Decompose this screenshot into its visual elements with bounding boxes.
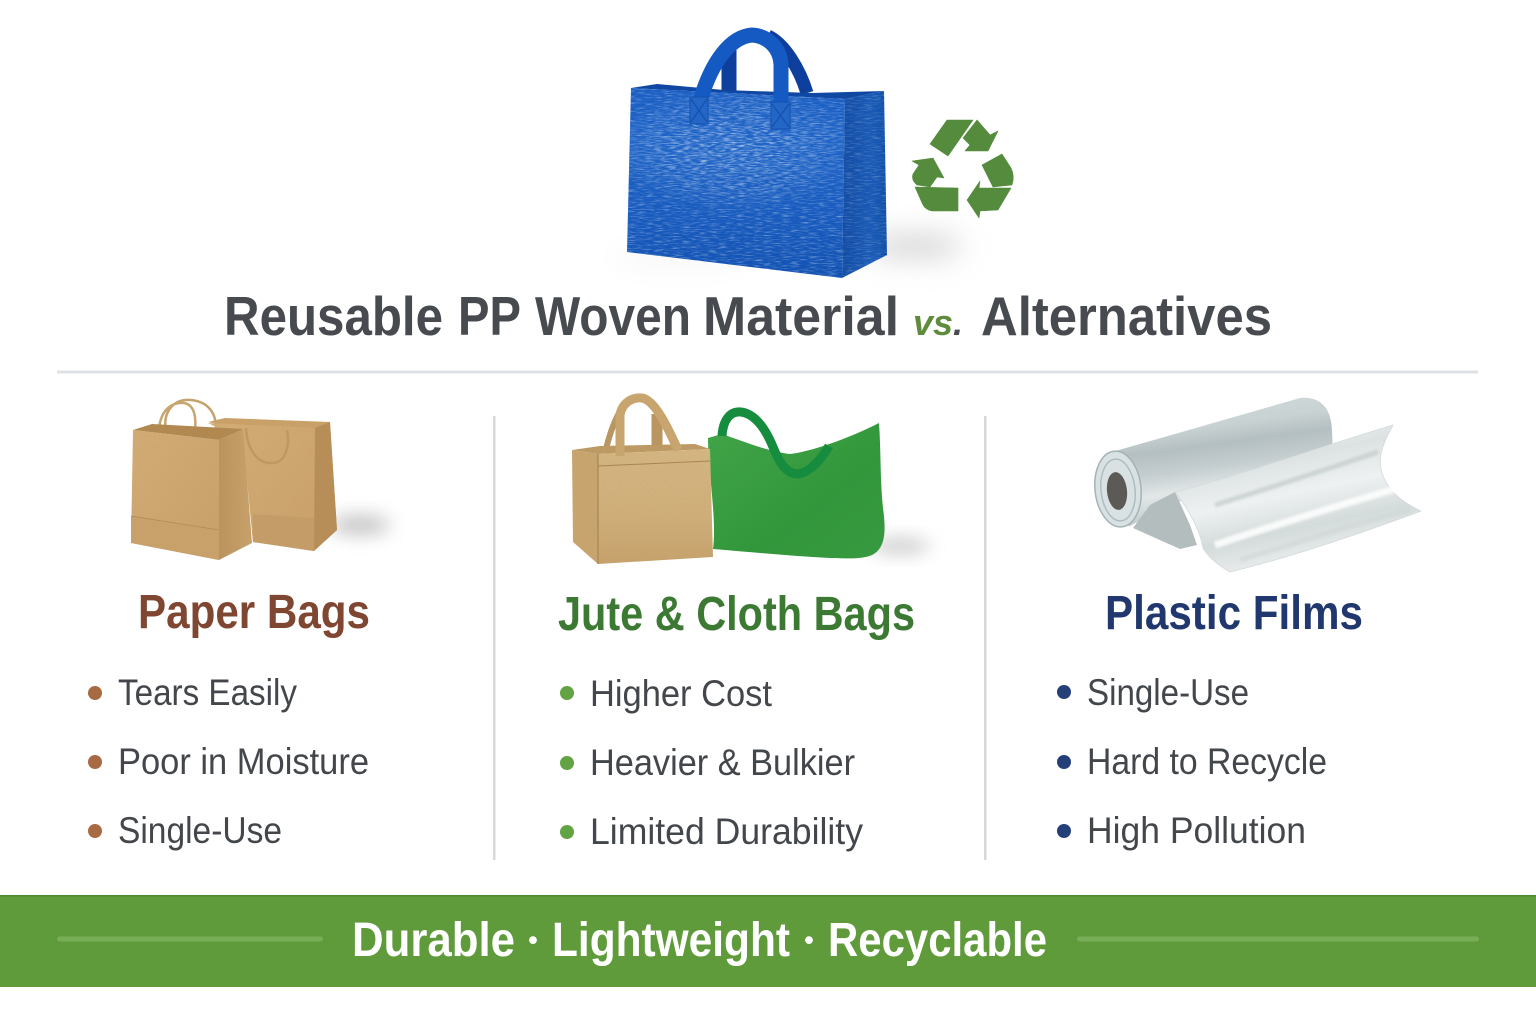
- heading: jute and cloth bags: Jute & Cloth Bags: [558, 588, 915, 641]
- list: plastic films: High Pollution: [1087, 810, 1306, 851]
- jute back straps: [606, 398, 632, 449]
- list: paper bags: Poor in Moisture: [118, 741, 369, 782]
- banner text: Recyclable: [828, 914, 1047, 967]
- list: paper bags: [88, 672, 369, 851]
- icon: recycling symbol: [912, 120, 1013, 218]
- title: Alternatives: [981, 285, 1272, 347]
- heading: plastic films: Plastic Films: [1105, 587, 1363, 640]
- list: jute and cloth bags: Limited Durability: [590, 811, 863, 852]
- banner text: [352, 914, 1047, 967]
- film underside: [1133, 492, 1197, 549]
- banner text: ·: [525, 914, 541, 967]
- hero: blue PP woven bag: [610, 35, 963, 280]
- banner text: ·: [801, 914, 817, 967]
- green bag: [708, 423, 885, 558]
- heading: paper bags: Paper Bags: [138, 586, 370, 639]
- icon: plastic film roll: [1091, 398, 1421, 572]
- title: vs.: [913, 302, 963, 343]
- list: paper bags: Tears Easily: [118, 672, 297, 713]
- list: paper bags: Single-Use: [118, 810, 282, 851]
- title: [224, 285, 1272, 347]
- back flap: [631, 84, 884, 99]
- roll body: [1095, 398, 1332, 526]
- front panel: [627, 88, 845, 278]
- jute bag: [572, 450, 598, 564]
- title: Material: [703, 285, 899, 347]
- list: jute and cloth bags: Higher Cost: [590, 673, 773, 714]
- back handle: [722, 48, 736, 92]
- list: plastic films: [1057, 672, 1327, 851]
- title: Reusable: [224, 285, 443, 347]
- list: jute and cloth bags: Heavier & Bulkier: [590, 742, 855, 783]
- front handle: [701, 35, 781, 103]
- banner text: Lightweight: [552, 914, 790, 967]
- roll core: [1105, 471, 1129, 511]
- handle patches: [690, 97, 708, 124]
- title: PP: [458, 285, 521, 347]
- loose film: [1175, 425, 1421, 572]
- icon: paper bags: [130, 400, 390, 563]
- list: plastic films: Hard to Recycle: [1087, 741, 1327, 782]
- bag shadow: [610, 233, 963, 263]
- list: jute and cloth bags: [560, 673, 863, 852]
- side panel: [842, 91, 887, 278]
- panel: jute and cloth bags: [558, 398, 930, 852]
- jute front strap: [620, 398, 678, 456]
- banner: [0, 895, 1536, 987]
- panel: plastic films: [1057, 398, 1421, 851]
- roll end: [1091, 449, 1145, 529]
- icon: jute and green cloth bags: [570, 398, 930, 567]
- title: Woven: [535, 285, 691, 347]
- panel: paper bags: [88, 400, 390, 851]
- banner text: Durable: [352, 914, 515, 967]
- woven texture: [625, 85, 847, 280]
- list: plastic films: Single-Use: [1087, 672, 1249, 713]
